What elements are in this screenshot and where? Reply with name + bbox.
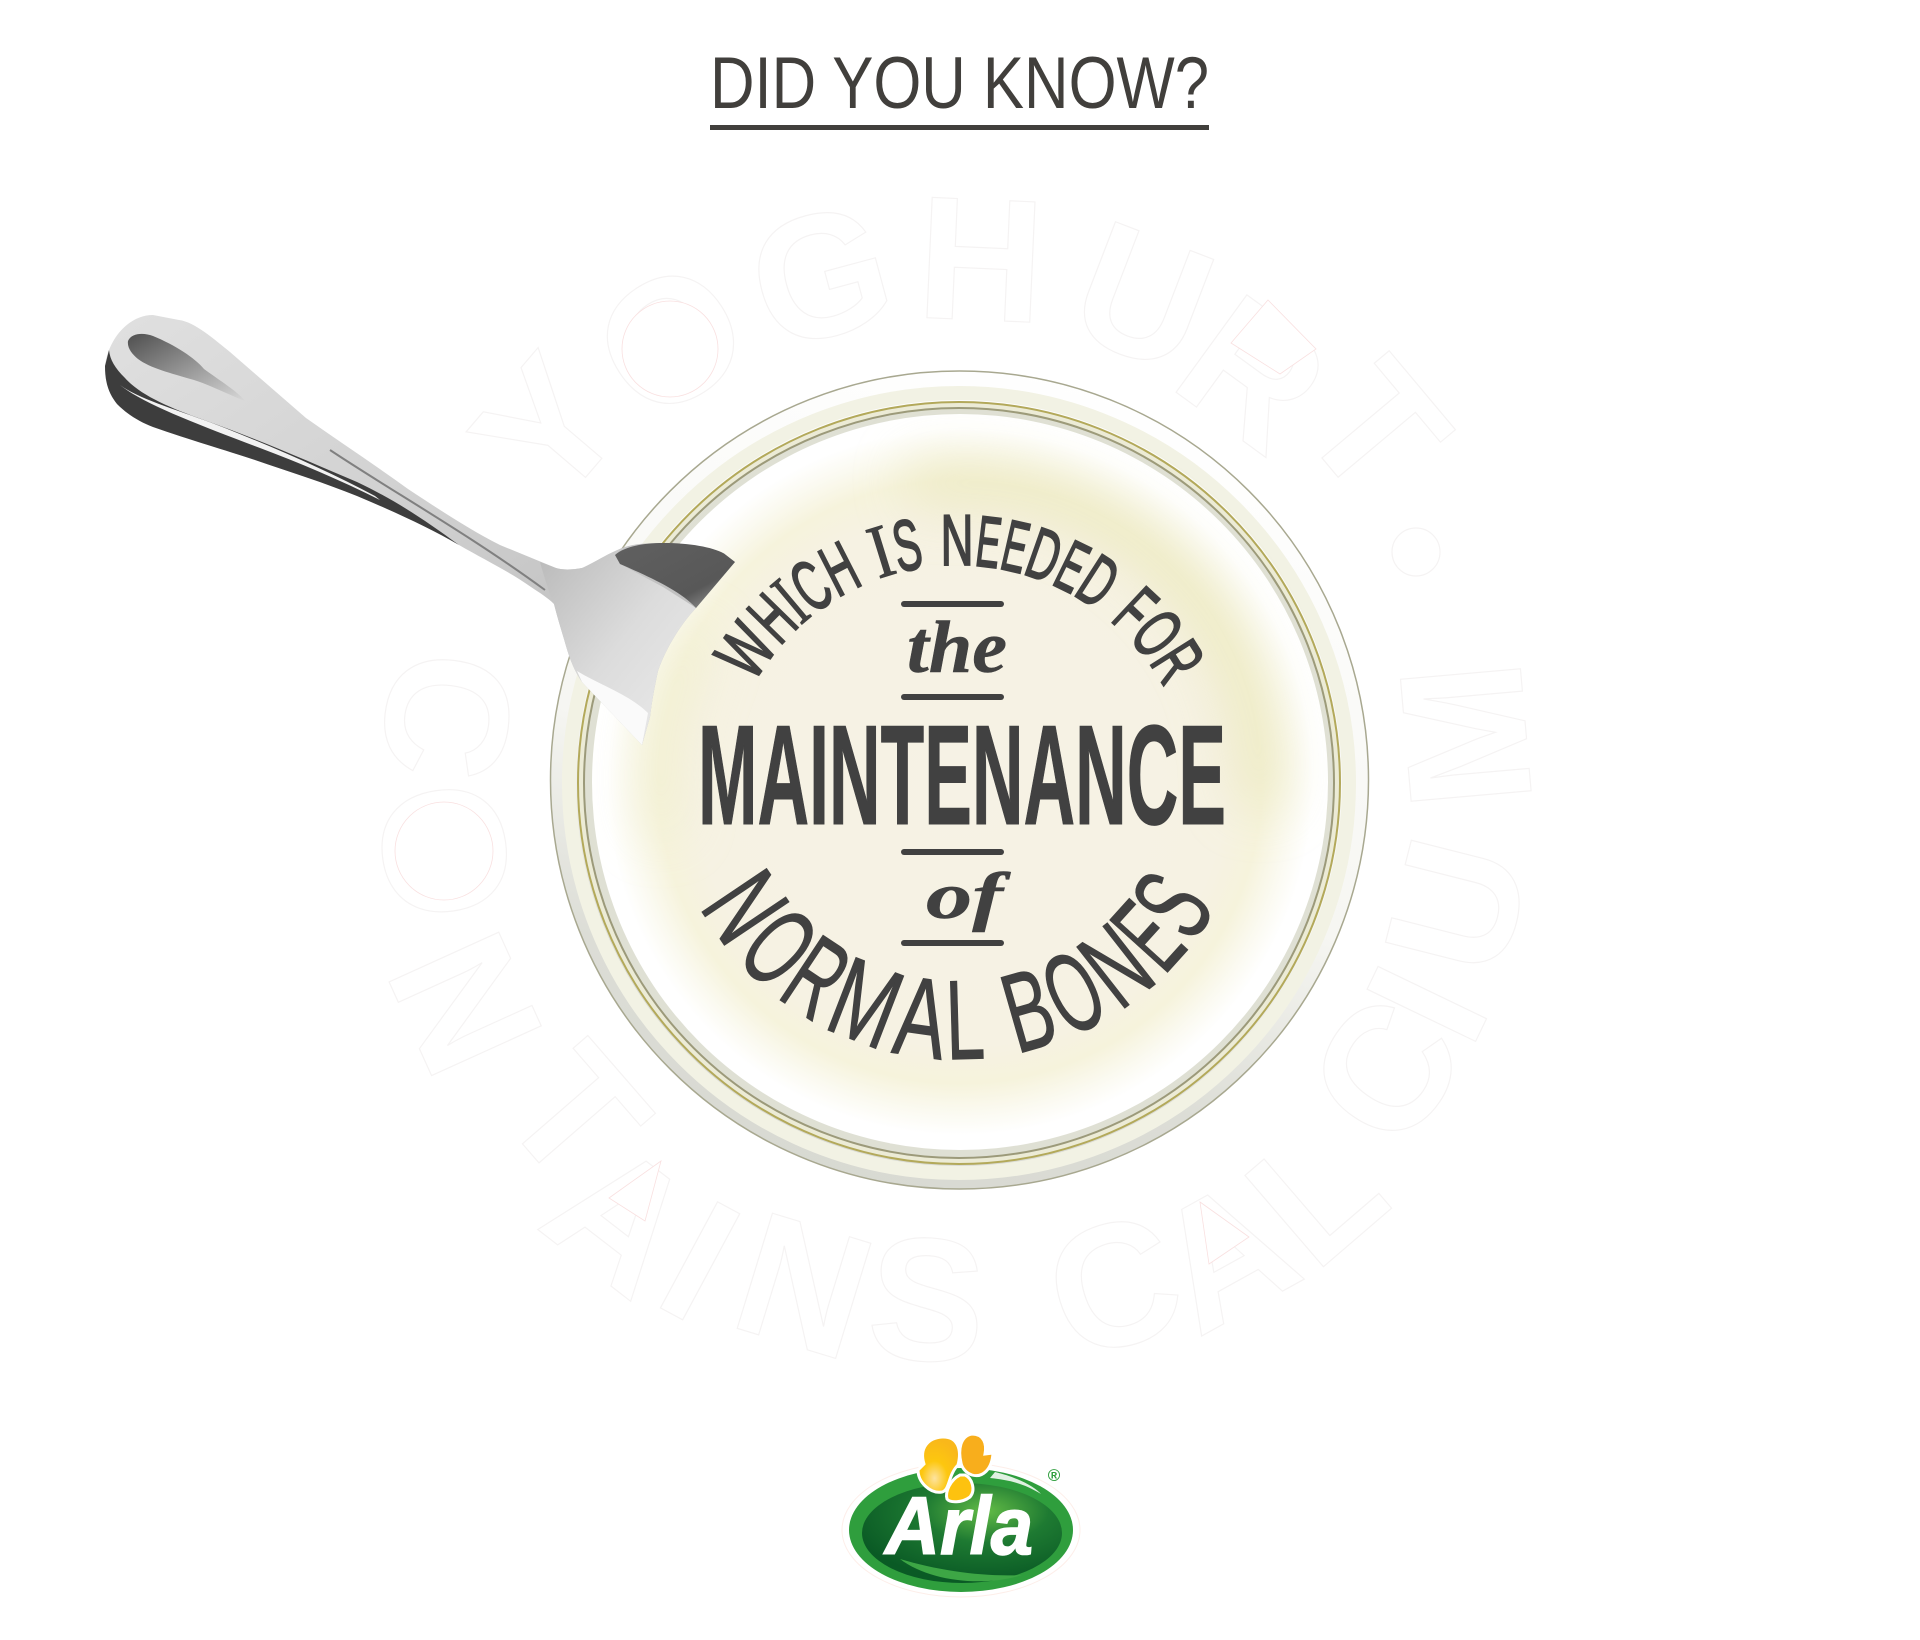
ghost curved text: yoghurt contains calcium: S [863, 1200, 991, 1401]
arc text: which is needed for: C [776, 545, 846, 628]
arc text: which is needed for: D [1064, 541, 1132, 624]
divider lines around "the" and "of" [901, 601, 1004, 946]
arc text: normal bones: E [1088, 879, 1207, 992]
arc text: which is needed for: R [1135, 628, 1219, 696]
arc text: normal bones: O [1023, 926, 1124, 1060]
arc text: which is needed for: F [1099, 573, 1171, 648]
ghost curved text: yoghurt contains calcium: G [730, 165, 912, 388]
spoon [105, 315, 735, 745]
ghost curved text: yoghurt contains calcium: I [632, 1164, 767, 1359]
arc text: normal bones: A [887, 953, 956, 1084]
ghost curved text: yoghurt contains calcium: A [1122, 1140, 1327, 1371]
Arla logo [842, 1434, 1080, 1597]
icon: flower [918, 1434, 993, 1502]
arc text: which is needed for: E [1043, 526, 1101, 609]
ghost curved text: yoghurt contains calcium: H [914, 160, 1048, 361]
script word: of: of [926, 860, 1011, 933]
ghost curved text: yoghurt contains calcium: R [1144, 258, 1361, 490]
arc text: normal bones [678, 850, 1237, 1084]
arc text: normal bones: R [762, 911, 872, 1043]
arc text: which is needed for: S [886, 504, 928, 588]
ghost curved text: yoghurt contains calcium: O [561, 222, 781, 459]
arc text: normal bones: S [1107, 851, 1237, 958]
arc text: normal bones: N [1057, 900, 1175, 1031]
heading word: MAINTENANCE: MAINTENANCE [698, 696, 1226, 855]
arc text: normal bones: N [678, 850, 812, 964]
arc text: which is needed for: D [1017, 513, 1071, 598]
ghost curved text: yoghurt contains calcium: M [1363, 654, 1570, 816]
script word: the: the [907, 607, 1007, 689]
arc text: which is needed for: E [995, 505, 1036, 590]
arc text: which is needed for: I [858, 509, 904, 595]
ghost curved text: yoghurt contains calcium: A [511, 1103, 730, 1334]
arc text: which is needed for [700, 500, 1219, 696]
ghost curved text: yoghurt contains calcium: C [342, 641, 551, 791]
ghost curved text: yoghurt contains calcium: I [1329, 940, 1526, 1068]
ghost curved text: yoghurt contains calcium: U [1049, 184, 1237, 411]
arc text: which is needed for: O [1116, 594, 1199, 672]
title: DID YOU KNOW? [710, 43, 1209, 124]
arc text: normal bones: M [813, 934, 918, 1074]
arc text: which is needed for: H [734, 580, 812, 657]
ghost curved text: yoghurt contains calcium: L [1212, 1086, 1420, 1303]
ghost curved text: yoghurt contains calcium: N [715, 1175, 893, 1398]
ghost curved text: yoghurt contains calcium: T [1267, 326, 1485, 533]
arc text: normal bones: B [989, 943, 1068, 1077]
ghost curved text: yoghurt contains calcium: C [1025, 1175, 1203, 1398]
arc text: which is needed for: H [809, 527, 872, 612]
arc text: normal bones: L [944, 956, 986, 1083]
ghost curved text: yoghurt contains calcium: O [337, 770, 550, 932]
yoghurt bowl [550, 371, 1368, 1189]
ghost curved text: yoghurt contains calcium: Y [436, 322, 660, 537]
arc text: which is needed for: W [700, 609, 791, 692]
ghost curved text: yoghurt contains calcium: U [1347, 821, 1568, 991]
arc text: which is needed for: E [972, 501, 1005, 584]
logo wordmark: Arla [883, 1481, 1033, 1572]
arc text: normal bones: O [717, 884, 842, 1010]
ghost curved text: yoghurt contains calcium: N [350, 906, 579, 1102]
arc text: which is needed for: I [757, 563, 824, 638]
ghost curved text: yoghurt contains calcium [337, 160, 1570, 1401]
ghost curved text: yoghurt contains calcium: C [1270, 964, 1503, 1179]
registered mark: ® [1048, 1466, 1061, 1485]
arc text: which is needed for: N [941, 500, 974, 581]
ghost curved text: yoghurt contains calcium: T [467, 1010, 684, 1219]
